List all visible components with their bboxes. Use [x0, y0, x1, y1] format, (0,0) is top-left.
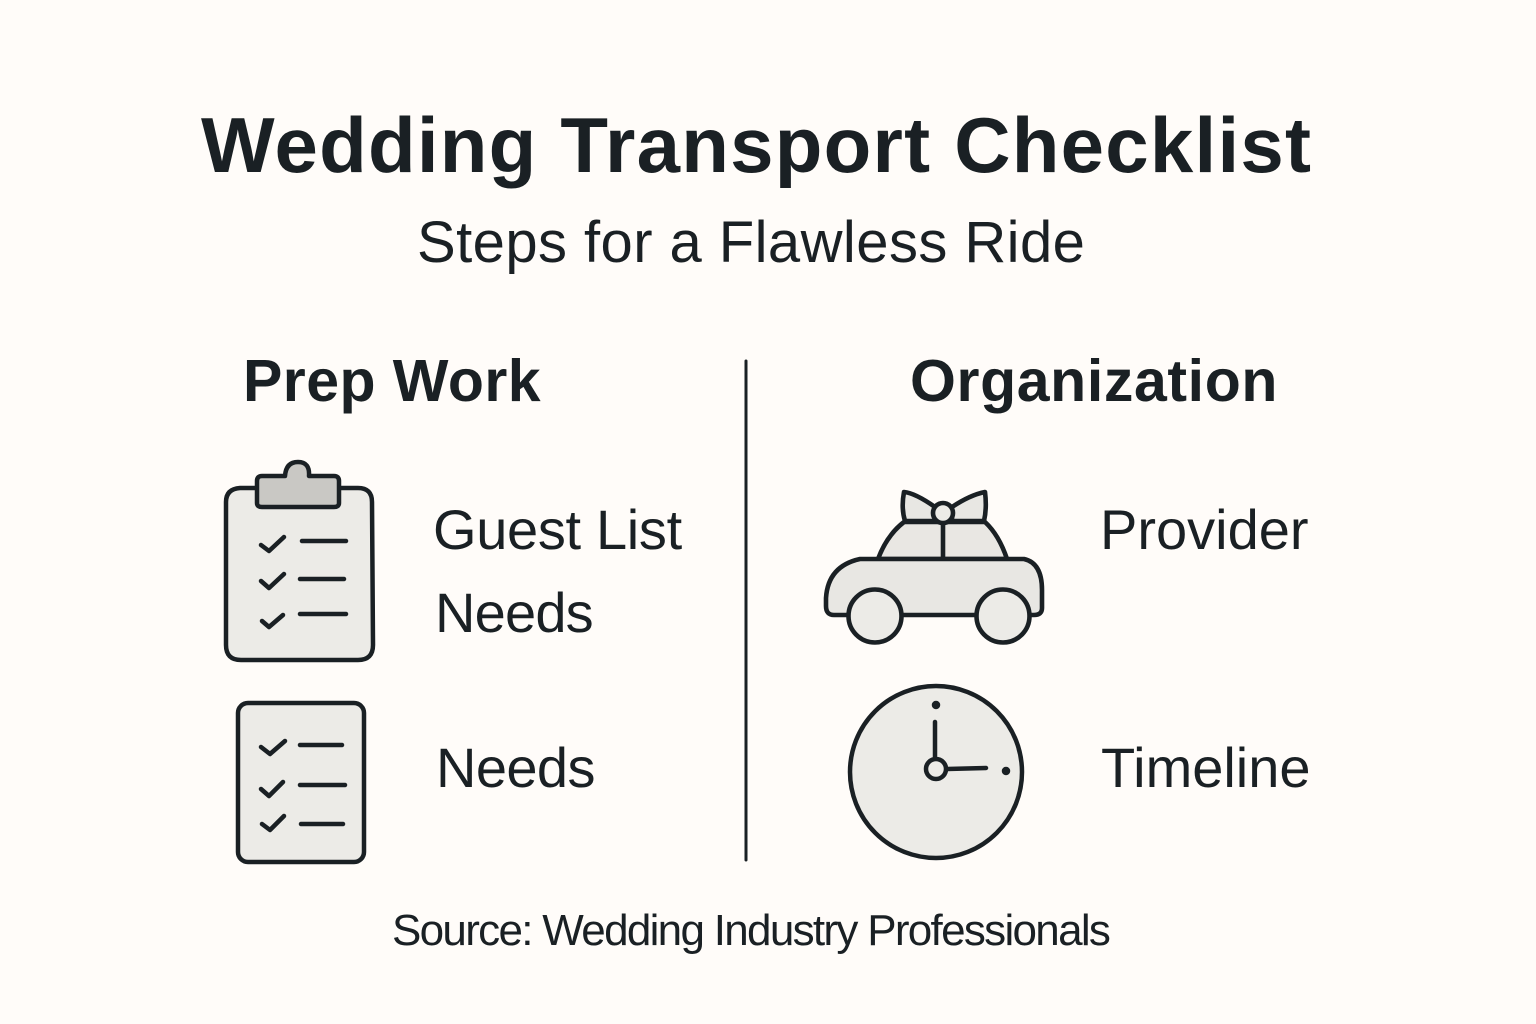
heading: organization: Organization — [910, 348, 1278, 414]
label: provider: Provider — [1100, 498, 1309, 561]
subtitle: Steps for a Flawless Ride — [417, 210, 1085, 275]
source note: Source: Wedding Industry Professionals — [392, 906, 1109, 955]
heading: prep work: Prep Work — [243, 348, 541, 414]
icon: car with bow — [826, 492, 1042, 642]
label: timeline: Timeline — [1101, 736, 1311, 799]
label: needs (upper): Needs — [435, 581, 593, 644]
icon: clock — [850, 686, 1022, 858]
icon: small checklist — [238, 703, 364, 862]
label: guest list: Guest List — [433, 498, 682, 561]
label: needs (lower): Needs — [436, 736, 595, 799]
title: Wedding Transport Checklist — [201, 101, 1312, 189]
icon: clipboard checklist — [226, 462, 373, 660]
